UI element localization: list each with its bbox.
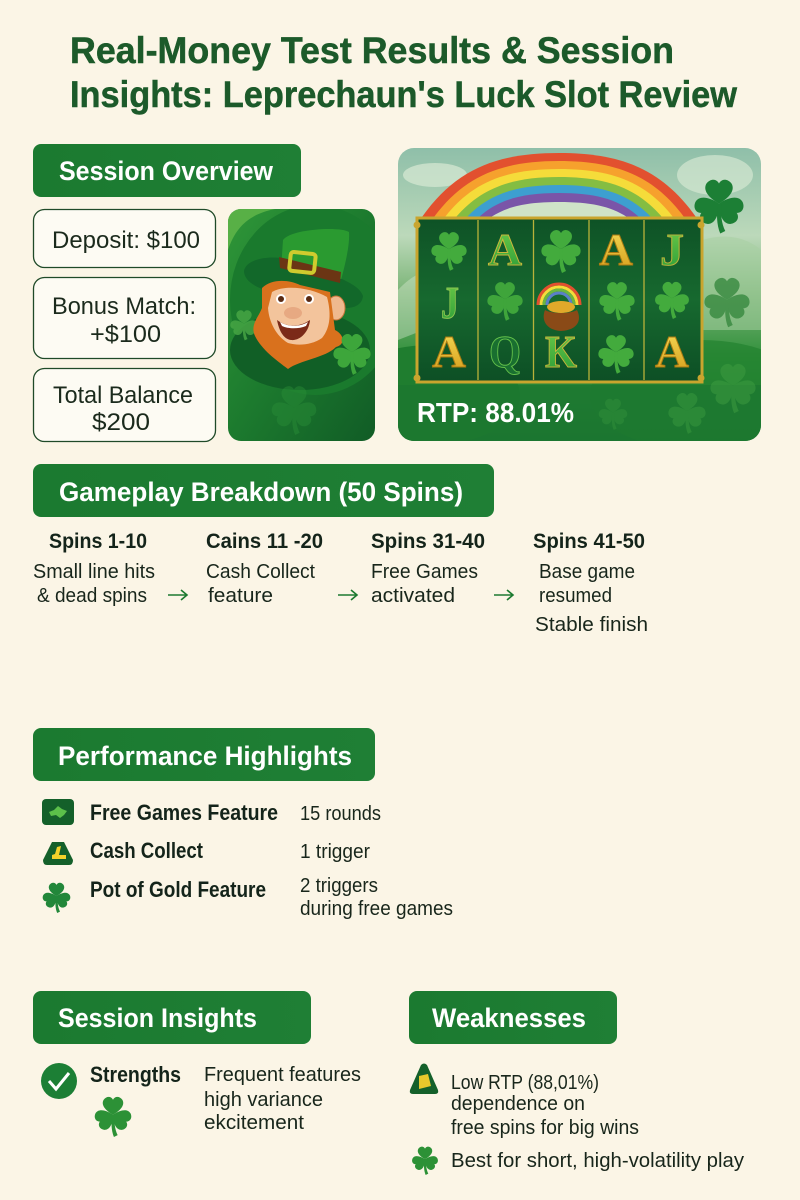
stat box: deposit — [34, 210, 216, 268]
step: spins 11-20: Cains 11 -20 — [206, 530, 323, 553]
strengths text — [204, 1064, 361, 1134]
reel board: K — [545, 326, 577, 377]
arrow — [338, 590, 357, 600]
step: spins 1-10: & dead spins — [37, 585, 147, 607]
step: spins 41-50: resumed — [539, 585, 612, 607]
strengths label: Strengths — [90, 1062, 181, 1087]
hat buckle — [289, 252, 316, 273]
nose — [284, 307, 302, 319]
strengths text: ekcitement — [204, 1112, 304, 1134]
icon: clover — [93, 1097, 133, 1137]
panel: gameplay breakdown heading — [33, 464, 494, 517]
clover top right — [692, 180, 746, 234]
illustration: slot game panel — [398, 148, 761, 441]
weakness text — [451, 1072, 639, 1139]
row: pot of gold feature: during free games — [300, 898, 453, 920]
step: spins 1-10 — [33, 530, 155, 607]
reel board: Q — [489, 326, 521, 377]
row: pot of gold feature — [41, 875, 453, 920]
row: free games feature: 15 rounds — [300, 803, 381, 825]
weakness text: free spins for big wins — [451, 1117, 639, 1139]
step: spins 11-20 — [206, 530, 323, 607]
step: spins 41-50: Stable finish — [535, 614, 648, 636]
row 1 symbols — [429, 232, 469, 271]
best-for note: Best for short, high-volatility play — [451, 1150, 744, 1172]
panel: session overview heading — [33, 144, 301, 197]
step: spins 11-20: Cash Collect — [206, 561, 315, 583]
stat box: total balance — [34, 368, 216, 442]
panel: weaknesses heading: Weaknesses — [432, 1003, 586, 1033]
step: spins 41-50: Spins 41-50 — [533, 530, 645, 553]
stat box: total balance: $200 — [92, 409, 150, 436]
icon: check — [41, 1063, 77, 1099]
icon: clover small — [411, 1147, 439, 1175]
title: Real-Money Test Results & Session — [70, 30, 674, 71]
illustration: leprechaun card — [228, 209, 375, 441]
strengths text: Frequent features — [204, 1064, 361, 1086]
step: spins 41-50 — [533, 530, 648, 636]
row 2 symbols: J — [441, 277, 459, 328]
row: cash collect: 1 trigger — [300, 841, 370, 863]
weakness text: dependence on — [451, 1093, 585, 1115]
reel board: J — [660, 224, 684, 275]
step: spins 1-10: Small line hits — [33, 561, 155, 583]
row: cash collect — [43, 838, 370, 865]
weakness text: Low RTP (88,01%) — [451, 1072, 599, 1094]
leprechaun hat crown — [281, 229, 349, 280]
hat band — [279, 257, 341, 283]
stat box: bonus match: +$100 — [90, 321, 161, 348]
strengths text: high variance — [204, 1089, 323, 1111]
stat box: bonus match — [34, 278, 216, 358]
step: spins 11-20: feature — [208, 585, 273, 607]
step: spins 31-40: activated — [371, 585, 455, 607]
row: free games feature: Free Games Feature — [90, 800, 278, 825]
step: spins 41-50: Base game — [539, 561, 635, 583]
stat box: bonus match: Bonus Match: — [52, 293, 196, 320]
panel: performance highlights heading — [33, 728, 375, 781]
row: pot of gold feature: Pot of Gold Feature — [90, 877, 266, 902]
row: pot of gold feature: 2 triggers — [300, 875, 378, 897]
step: spins 31-40 — [371, 530, 485, 607]
rainbow — [422, 153, 696, 217]
hair and beard — [253, 281, 343, 369]
row 3 symbols: A — [432, 326, 466, 377]
stat box: total balance: Total Balance — [53, 382, 193, 409]
eyes — [276, 294, 286, 304]
title — [70, 30, 737, 115]
panel: session insights heading — [33, 991, 311, 1044]
ear — [327, 296, 345, 320]
stat box: deposit: Deposit: $100 — [52, 227, 200, 254]
arrow — [494, 590, 513, 600]
panel: session insights heading: Session Insights — [58, 1003, 257, 1033]
panel: weaknesses heading — [409, 991, 617, 1044]
title: Insights: Leprechaun's Luck Slot Review — [70, 74, 737, 115]
step: spins 31-40: Spins 31-40 — [371, 530, 485, 553]
step: spins 31-40: Free Games — [371, 561, 478, 583]
panel: performance highlights heading: Performance Highlights — [58, 741, 352, 771]
reel board: A — [488, 224, 522, 275]
leprechaun hat brim — [244, 258, 363, 308]
panel: session overview heading: Session Overview — [59, 156, 274, 186]
pot of gold — [538, 284, 580, 331]
row: free games feature — [42, 799, 381, 825]
reel board: A — [655, 326, 689, 377]
row: cash collect: Cash Collect — [90, 838, 204, 863]
reel board — [414, 218, 704, 382]
panel: gameplay breakdown heading: Gameplay Breakdown (50 Spins) — [59, 477, 463, 507]
mouth — [277, 320, 310, 340]
face — [268, 288, 330, 345]
rtp label: RTP: 88.01% — [417, 397, 574, 428]
arrow — [168, 590, 187, 600]
reel board: A — [599, 224, 633, 275]
step: spins 1-10: Spins 1-10 — [49, 530, 147, 553]
icon: warning — [410, 1064, 438, 1094]
clover right — [331, 334, 373, 375]
clouds — [403, 163, 467, 187]
